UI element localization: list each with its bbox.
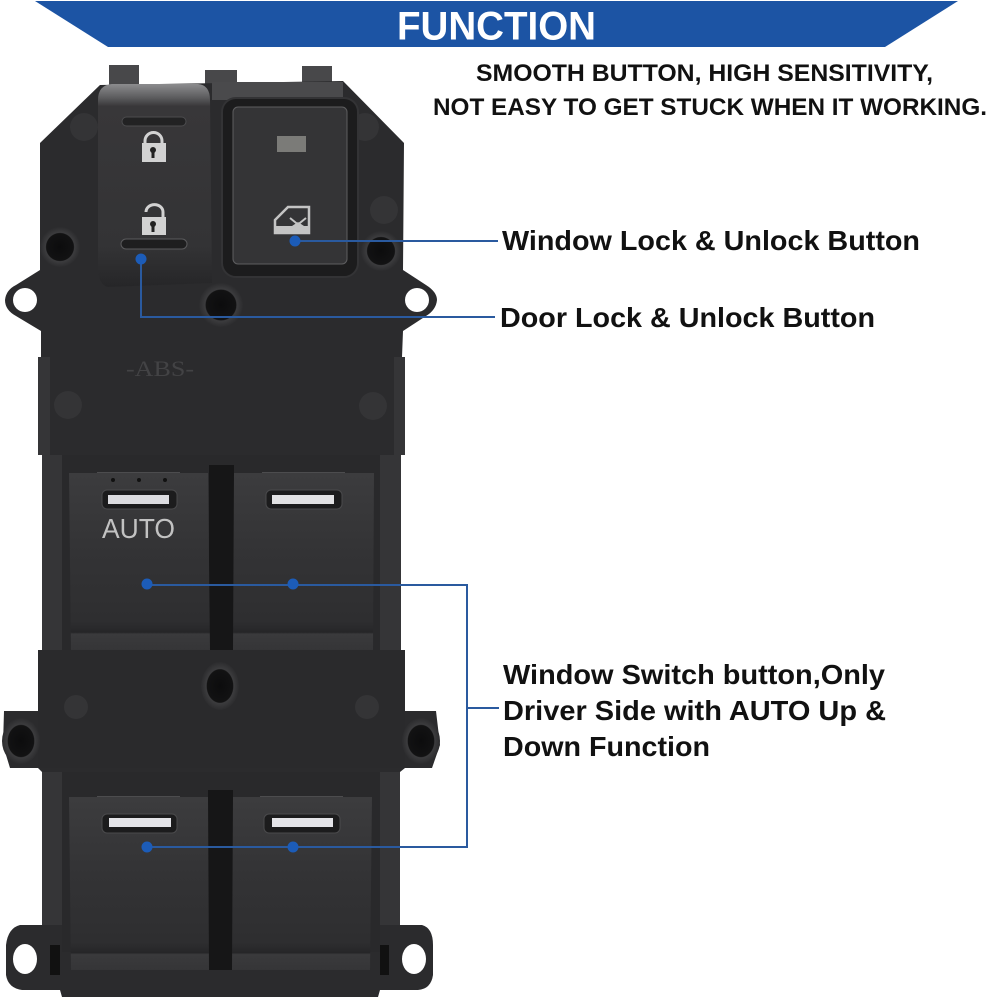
cross bar section bbox=[38, 650, 405, 768]
mount ear holes top bbox=[13, 288, 37, 312]
icon: window lock bbox=[275, 207, 309, 233]
callout: window switch buttons: Window Switch button,Only bbox=[503, 659, 885, 690]
top clips bbox=[109, 65, 332, 90]
grey roof above window lock bbox=[212, 82, 343, 100]
subtitle text: SMOOTH BUTTON, HIGH SENSITIVITY, bbox=[476, 60, 933, 87]
window switch: rear left bbox=[69, 796, 209, 970]
dark channels between buttons bbox=[209, 465, 234, 653]
callout: window lock and unlock button: Window Lock & Unlock Button bbox=[502, 225, 920, 256]
window lock button surround bbox=[222, 98, 358, 277]
title banner bbox=[35, 1, 958, 48]
window lock button bbox=[233, 107, 347, 264]
window switch: driver AUTO: AUTO bbox=[102, 513, 175, 544]
subtitle text bbox=[433, 60, 987, 121]
callout: window switch buttons: Driver Side with AUTO Up & bbox=[503, 695, 886, 726]
icon: locked padlock bbox=[142, 132, 166, 162]
embossed ABS: -ABS- bbox=[126, 356, 194, 381]
callout: window switch buttons: Down Function bbox=[503, 731, 710, 762]
icon: unlocked padlock bbox=[142, 205, 166, 235]
callout: window switch buttons bbox=[142, 578, 886, 852]
embossed round marks bbox=[54, 113, 398, 719]
mount ear holes bottom bbox=[13, 944, 37, 974]
product: window switch panel bbox=[2, 65, 440, 997]
side notches bbox=[38, 357, 405, 925]
door lock rocker bbox=[98, 84, 212, 287]
window switch: driver AUTO bbox=[69, 472, 210, 650]
screw posts bbox=[40, 227, 401, 710]
main body outline bbox=[3, 81, 440, 997]
window switch: front passenger bbox=[233, 472, 374, 650]
indicator window bbox=[277, 136, 306, 152]
recess behind window buttons bbox=[62, 455, 380, 650]
callout: door lock and unlock button bbox=[136, 254, 875, 333]
callout: window lock and unlock button bbox=[290, 225, 920, 256]
window switch: rear right bbox=[232, 796, 372, 970]
callout: door lock and unlock button: Door Lock & Unlock Button bbox=[500, 302, 875, 333]
mount ear holes middle bbox=[2, 718, 40, 764]
subtitle text: NOT EASY TO GET STUCK WHEN IT WORKING. bbox=[433, 94, 987, 121]
title banner: FUNCTION bbox=[397, 4, 596, 48]
